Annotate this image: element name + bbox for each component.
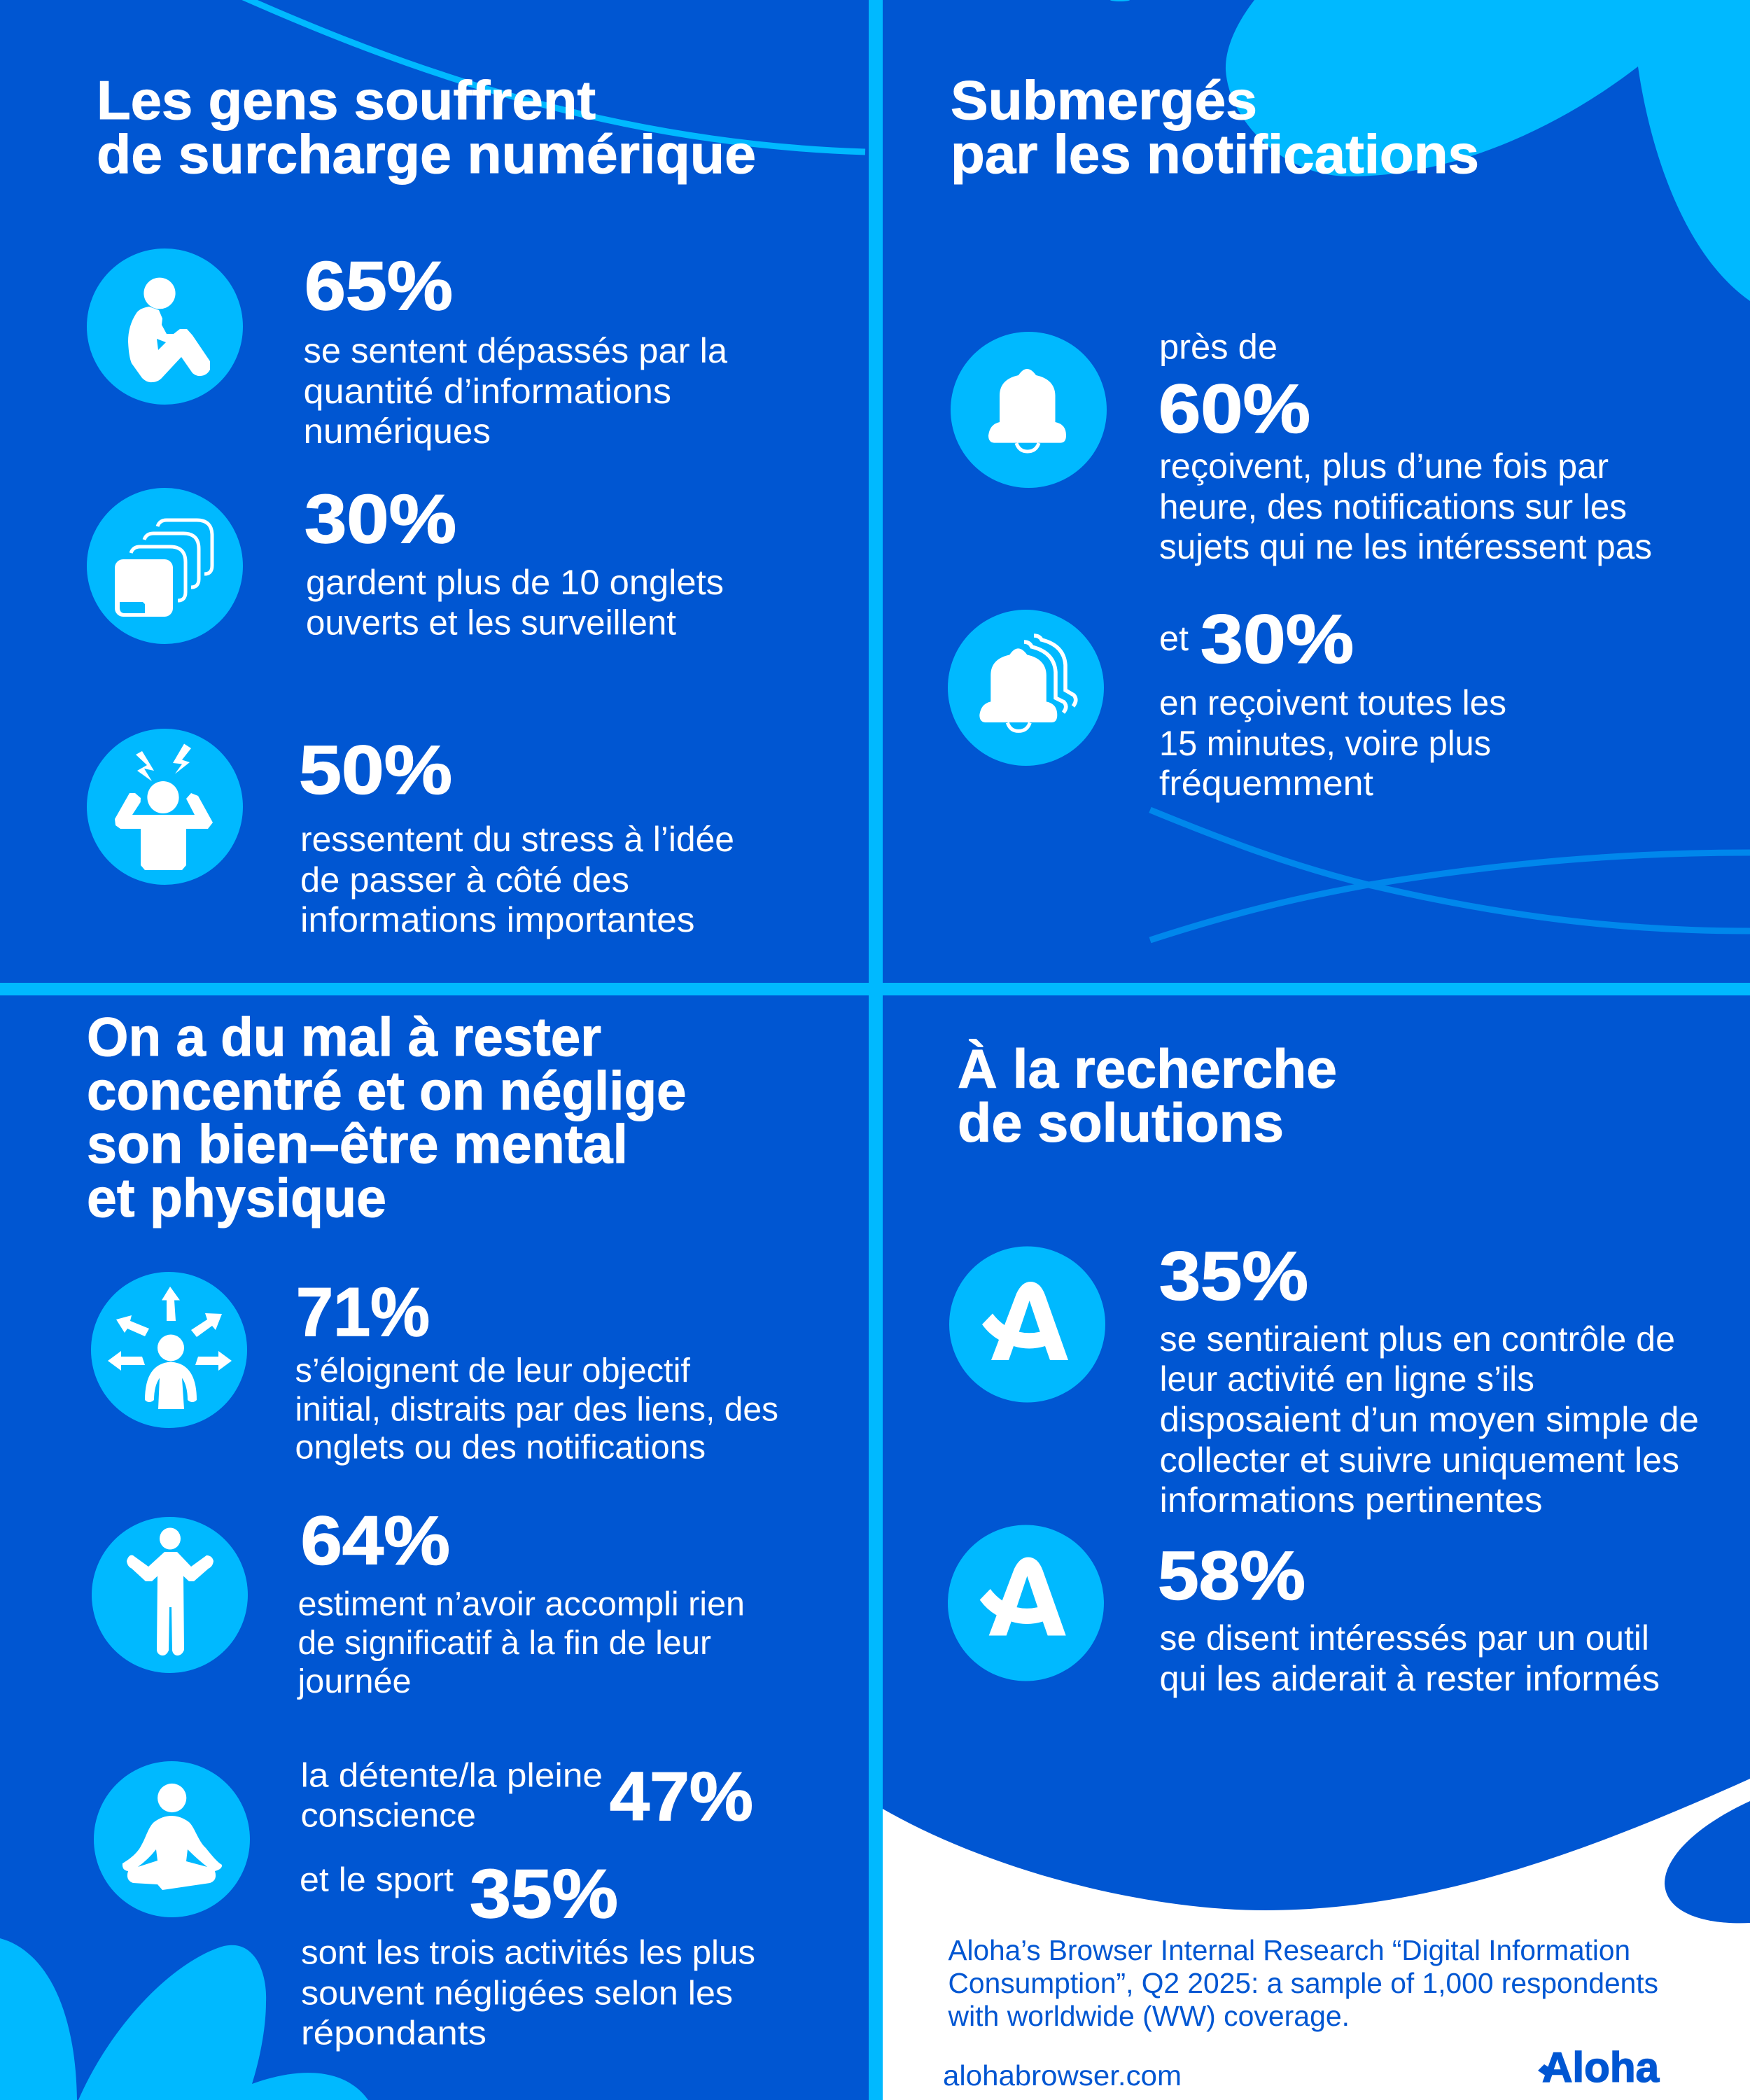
stat: 50%: de passer à côté des bbox=[300, 860, 629, 899]
stat: 47% and 35%: sont les trois activités les plus bbox=[301, 1935, 755, 1971]
source note: Aloha’s Browser Internal Research “Digital Information bbox=[948, 1934, 1630, 1966]
stat: 65% bbox=[304, 247, 727, 451]
heading: digital overload bbox=[97, 69, 756, 185]
stat: 47% and 35%: 35% bbox=[470, 1855, 618, 1932]
stat: 71%: onglets ou des notifications bbox=[295, 1429, 706, 1466]
stat: 65%: quantité d’informations bbox=[304, 372, 671, 411]
stat: 71% bbox=[295, 1273, 778, 1466]
panel: focus and wellbeing bbox=[87, 1006, 778, 2052]
stat: 47% and 35% bbox=[300, 1757, 755, 2052]
source note bbox=[948, 1934, 1658, 2032]
heading: notifications bbox=[951, 69, 1479, 185]
stat: 30% notifications: fréquemment bbox=[1159, 764, 1373, 803]
stat: 35%: se sentiraient plus en contrôle de bbox=[1159, 1320, 1675, 1359]
panel: solutions bbox=[943, 1037, 1699, 2092]
curves: right panel bottom bbox=[1150, 810, 1750, 940]
stat: 58%: se disent intéressés par un outil bbox=[1159, 1618, 1649, 1658]
stat: 35% bbox=[1159, 1238, 1699, 1520]
stat: 30%: gardent plus de 10 onglets bbox=[306, 563, 724, 602]
blob: footer blue bbox=[1665, 1801, 1750, 1923]
stat: 35%: informations pertinentes bbox=[1159, 1480, 1543, 1520]
source note: Consumption”, Q2 2025: a sample of 1,000 respondents bbox=[948, 1967, 1658, 1999]
icon: stacked tabs bbox=[87, 488, 243, 644]
stat: 30% notifications: 30% bbox=[1200, 601, 1354, 678]
stat: 35%: collecter et suivre uniquement les bbox=[1159, 1441, 1679, 1480]
heading: focus and wellbeing: et physique bbox=[87, 1167, 386, 1228]
stat: 30%: 30% bbox=[304, 480, 456, 557]
heading: solutions bbox=[958, 1037, 1337, 1154]
blob: top right bbox=[1226, 0, 1750, 301]
stat: 30% notifications bbox=[1159, 601, 1506, 803]
stat: 65%: 65% bbox=[304, 247, 453, 324]
curve: top left panel bbox=[240, 0, 865, 152]
heading: digital overload: de surcharge numérique bbox=[97, 123, 756, 185]
stat: 64%: de significatif à la fin de leur bbox=[298, 1625, 711, 1662]
logo: Aloha: Aloha bbox=[1542, 2044, 1660, 2091]
heading: notifications: Submergés bbox=[951, 69, 1257, 131]
stat: 35%: leur activité en ligne s’ils bbox=[1159, 1359, 1534, 1399]
stat: 50%: informations importantes bbox=[300, 900, 694, 939]
stat: 58%: 58% bbox=[1158, 1537, 1306, 1614]
icon: stressed person bbox=[87, 729, 243, 885]
stat: 47% and 35%: conscience bbox=[301, 1798, 476, 1834]
icon: shrugging person bbox=[92, 1517, 248, 1673]
stat: 50%: 50% bbox=[299, 731, 452, 808]
stat: 47% and 35%: 47% bbox=[610, 1758, 753, 1835]
icon: Aloha A bbox=[949, 1246, 1105, 1403]
heading: solutions: de solutions bbox=[958, 1092, 1284, 1154]
stat: 30% notifications: 15 minutes, voire plus bbox=[1159, 724, 1491, 763]
stat: 50% bbox=[299, 731, 734, 939]
stat: 50%: ressentent du stress à l’idée bbox=[300, 820, 734, 859]
heading: digital overload: Les gens souffrent bbox=[97, 69, 596, 131]
stat: 60%: 60% bbox=[1158, 370, 1310, 447]
white footer area bbox=[883, 1779, 1750, 2100]
stat: 60%: reçoivent, plus d’une fois par bbox=[1159, 447, 1609, 486]
stat: 58%: qui les aiderait à rester informés bbox=[1159, 1659, 1660, 1698]
stat: 65%: se sentent dépassés par la bbox=[304, 331, 727, 370]
stat: 71%: s’éloignent de leur objectif bbox=[295, 1352, 691, 1390]
blob: top small bbox=[1110, 0, 1130, 1]
stat: 47% and 35%: souvent négligées selon les bbox=[301, 1975, 733, 2012]
icon: distracted person bbox=[91, 1272, 247, 1428]
icon: meditating person bbox=[94, 1761, 250, 1917]
panel: notifications bbox=[948, 69, 1652, 803]
stat: 58% bbox=[1158, 1537, 1660, 1698]
stat: 30% notifications: et bbox=[1159, 619, 1189, 658]
panel: digital overload bbox=[87, 69, 756, 939]
stat: 64%: journée bbox=[296, 1663, 412, 1700]
heading: notifications: par les notifications bbox=[951, 123, 1479, 185]
blob: bottom left bbox=[0, 1938, 368, 2100]
heading: focus and wellbeing bbox=[87, 1006, 686, 1228]
stat: 47% and 35%: et le sport bbox=[300, 1862, 454, 1898]
stat: 64%: estiment n’avoir accompli rien bbox=[298, 1586, 745, 1623]
stat: 35%: disposaient d’un moyen simple de bbox=[1159, 1400, 1699, 1439]
stat: 60%: près de bbox=[1159, 328, 1278, 367]
stat: 47% and 35%: la détente/la pleine bbox=[301, 1757, 603, 1795]
stat: 30% bbox=[304, 480, 724, 643]
heading: focus and wellbeing: concentré et on néglige bbox=[87, 1060, 686, 1121]
stat: 65%: numériques bbox=[304, 412, 491, 451]
stat: 60%: sujets qui ne les intéressent pas bbox=[1159, 527, 1652, 566]
stat: 60%: heure, des notifications sur les bbox=[1159, 487, 1627, 526]
website: alohabrowser.com bbox=[943, 2059, 1182, 2092]
stat: 64%: 64% bbox=[301, 1502, 450, 1579]
stat: 30% notifications: en reçoivent toutes les bbox=[1159, 683, 1506, 722]
icon: sitting person bbox=[87, 248, 243, 405]
icon: ringing bell bbox=[948, 610, 1104, 766]
icon: Aloha A second bbox=[948, 1525, 1104, 1681]
stat: 71%: 71% bbox=[296, 1273, 430, 1350]
stat: 47% and 35%: répondants bbox=[301, 2015, 486, 2052]
stat: 60% bbox=[1158, 328, 1652, 566]
stat: 64% bbox=[296, 1502, 745, 1700]
source note: with worldwide (WW) coverage. bbox=[948, 2000, 1350, 2032]
heading: focus and wellbeing: On a du mal à rester bbox=[87, 1006, 601, 1068]
stat: 35%: 35% bbox=[1159, 1238, 1308, 1315]
stat: 71%: initial, distraits par des liens, des bbox=[295, 1392, 778, 1428]
icon: bell bbox=[951, 332, 1107, 488]
heading: focus and wellbeing: son bien–être mental bbox=[87, 1113, 628, 1175]
stat: 30%: ouverts et les surveillent bbox=[306, 603, 676, 643]
heading: solutions: À la recherche bbox=[958, 1037, 1337, 1099]
